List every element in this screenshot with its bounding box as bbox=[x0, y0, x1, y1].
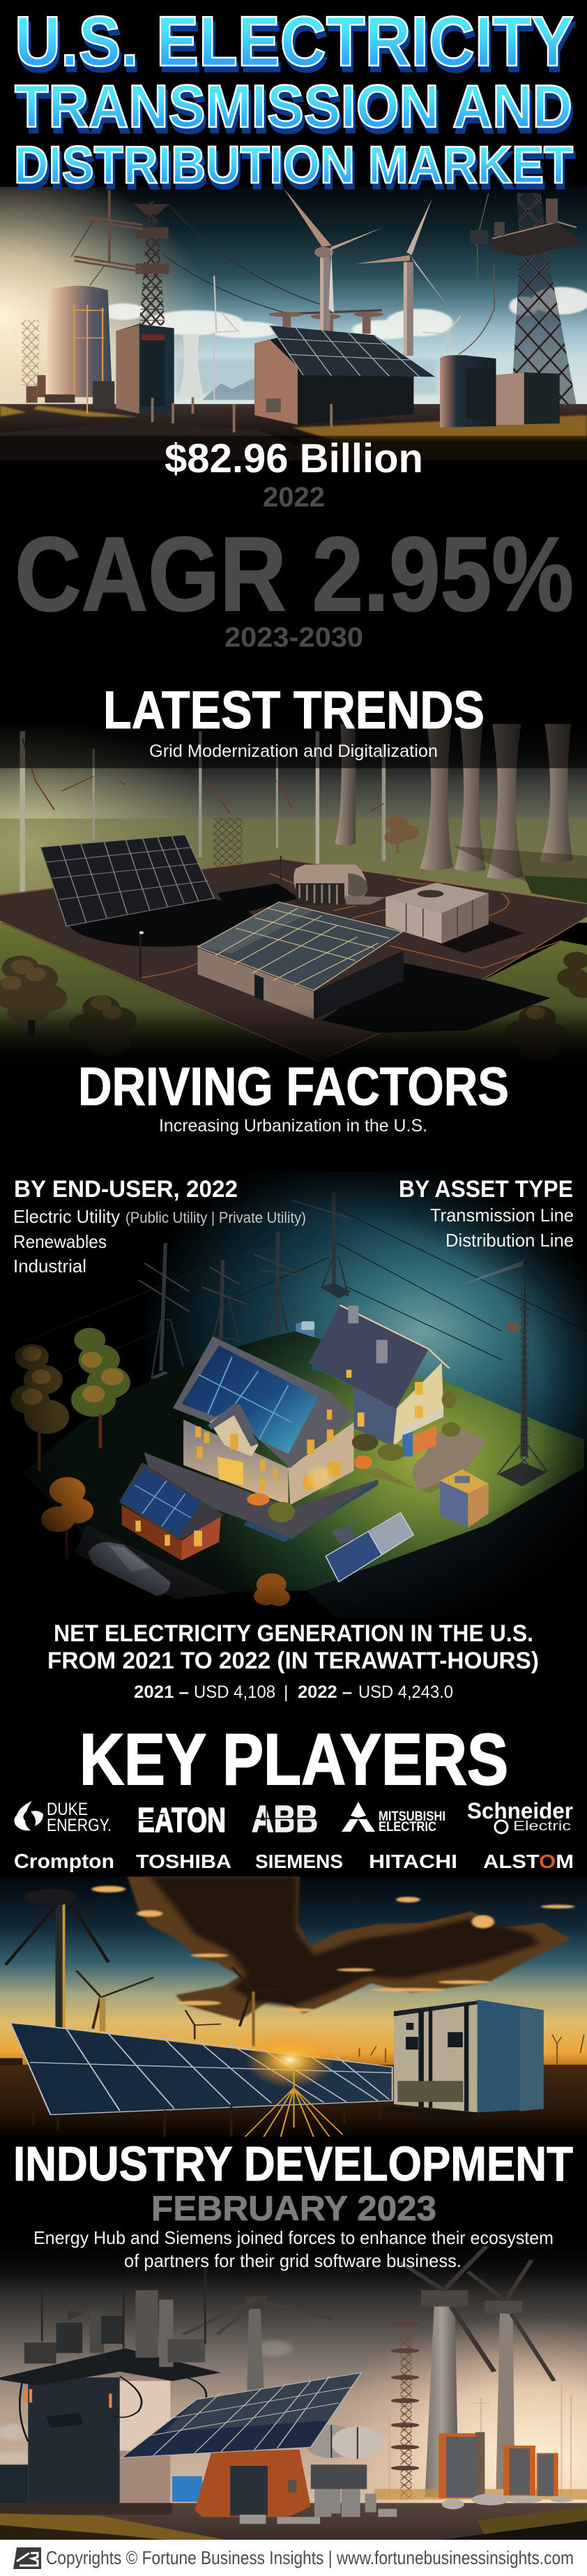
ground bbox=[0, 2503, 587, 2540]
market size value: $82.96 Billion bbox=[165, 436, 423, 481]
solar panel bbox=[122, 2373, 361, 2457]
small house bbox=[119, 1462, 224, 1560]
illustration: solar and storage site bbox=[0, 724, 587, 1062]
renewables item: Renewables bbox=[13, 1231, 107, 1252]
tank and small structures bbox=[45, 286, 112, 397]
logo: Duke Energy: ENERGY. bbox=[47, 1816, 112, 1835]
illustration: substation, solar panel and turbines bbox=[0, 2245, 587, 2540]
big pylon with turbine bbox=[455, 1217, 587, 1486]
asphalt yard bbox=[0, 859, 587, 1062]
fields bbox=[0, 2065, 587, 2148]
electric utility sub-types: (Public Utility | Private Utility) bbox=[125, 1209, 306, 1226]
foreground grass bbox=[0, 2506, 587, 2540]
logo: Duke Energy: DUKE bbox=[47, 1800, 88, 1819]
trees bbox=[0, 952, 587, 1062]
net electricity generation heading: FROM 2021 TO 2022 (IN TERAWATT-HOURS) bbox=[47, 1648, 539, 1674]
asset type heading: BY ASSET TYPE bbox=[399, 1176, 573, 1203]
distribution line item: Distribution Line bbox=[445, 1230, 574, 1251]
right cabinets bbox=[440, 355, 560, 428]
electrical cabinet left bbox=[116, 324, 174, 414]
water tank bbox=[294, 865, 386, 905]
solar-roof shed bbox=[198, 902, 404, 1019]
industry development description: Energy Hub and Siemens joined forces to enhance their ecosystem bbox=[33, 2227, 554, 2248]
illustration: solar houses and power lines bbox=[10, 1172, 587, 1618]
net generation values: | bbox=[284, 1682, 289, 1702]
market size year: 2022 bbox=[263, 482, 325, 513]
grass bbox=[0, 922, 587, 1070]
key players heading: KEY PLAYERS bbox=[79, 1719, 508, 1800]
turbine poles and blades bbox=[22, 731, 383, 908]
industry development description: of partners for their grid software business. bbox=[124, 2250, 462, 2271]
logo: Duke Energy bbox=[14, 1800, 112, 1835]
logo: Hitachi: HITACHI bbox=[369, 1851, 457, 1872]
logo: Crompton: Crompton bbox=[14, 1851, 114, 1873]
driving factors heading: DRIVING FACTORS bbox=[78, 1057, 509, 1117]
ground bbox=[0, 404, 587, 460]
by end-user segment bbox=[13, 1176, 306, 1276]
key player logos bbox=[14, 1798, 574, 1873]
development date: FEBRUARY 2023 bbox=[151, 2189, 436, 2228]
battery cabinet bbox=[440, 1470, 489, 1528]
driving factors subtitle: Increasing Urbanization in the U.S. bbox=[159, 1116, 427, 1136]
car bbox=[88, 1542, 170, 1596]
logo: Toshiba: TOSHIBA bbox=[136, 1851, 231, 1872]
footer bar bbox=[0, 2540, 587, 2576]
hill bbox=[22, 1332, 584, 1593]
logo: Eaton: EATON bbox=[137, 1802, 226, 1839]
substation bbox=[0, 2267, 221, 2515]
logo: Schneider Electric: Schneider bbox=[467, 1798, 573, 1823]
sun flare and rays bbox=[236, 2032, 342, 2146]
logo: Alstom: ALST OM bbox=[483, 1851, 574, 1872]
turbines bbox=[6, 1889, 584, 2065]
industry development description bbox=[33, 2227, 554, 2271]
clouds bbox=[92, 1876, 574, 2021]
logo: Schneider Electric bbox=[467, 1798, 573, 1834]
far tree bbox=[384, 816, 419, 853]
main title bbox=[14, 3, 576, 199]
logo: Mitsubishi Electric: ELECTRIC bbox=[379, 1820, 436, 1835]
solar-roof building bbox=[254, 326, 435, 425]
net generation values: USD 4,243.0 bbox=[358, 1682, 453, 1702]
illustration: solar farm at sunset bbox=[0, 1876, 587, 2137]
lattice tower bbox=[391, 2321, 419, 2499]
charging cabinets bbox=[439, 2432, 573, 2509]
spheres and equipment bbox=[240, 2425, 397, 2524]
solar panels bbox=[10, 2023, 392, 2139]
wind turbines bbox=[199, 188, 460, 400]
latest trends heading: LATEST TRENDS bbox=[103, 681, 485, 740]
logo: Siemens: SIEMENS bbox=[255, 1851, 343, 1872]
right lattice tower bbox=[459, 193, 584, 405]
latest trends subtitle: Grid Modernization and Digitalization bbox=[149, 741, 438, 761]
shadows bbox=[68, 883, 550, 1033]
cooling towers bbox=[335, 724, 573, 880]
CAGR period: 2023-2030 bbox=[224, 622, 363, 653]
solar array 1 bbox=[40, 835, 214, 926]
industrial item: Industrial bbox=[13, 1256, 86, 1276]
electric utility item: Electric Utility bbox=[13, 1206, 120, 1227]
lattice tower left bbox=[71, 190, 169, 326]
hero illustration: grid, wind and solar infrastructure bbox=[0, 187, 587, 460]
logo: Schneider Electric: Electric bbox=[513, 1819, 571, 1834]
net generation values: 2021 – bbox=[134, 1682, 189, 1702]
logo: Mitsubishi Electric: MITSUBISHI bbox=[379, 1809, 445, 1824]
porch and base bbox=[144, 1452, 378, 1539]
transformer box bbox=[386, 883, 489, 944]
trees bbox=[10, 1328, 290, 1606]
battery container bbox=[382, 2000, 544, 2121]
orange hut bbox=[195, 2450, 311, 2517]
net electricity generation heading: NET ELECTRICITY GENERATION IN THE U.S. bbox=[54, 1620, 533, 1647]
icon: Fortune Business Insights logo bbox=[13, 2547, 41, 2569]
back house bbox=[309, 1305, 449, 1456]
turbines bbox=[183, 2246, 554, 2497]
logo: ABB: ABB bbox=[252, 1798, 318, 1840]
net generation values: USD 4,108 bbox=[194, 1682, 275, 1702]
driveway bbox=[413, 1422, 487, 1491]
cooling stack bbox=[178, 335, 204, 397]
title shadow bbox=[16, 8, 576, 199]
net generation values: 2022 – bbox=[298, 1682, 352, 1702]
power lines and pylons bbox=[22, 1209, 587, 1371]
by asset type segment bbox=[399, 1176, 574, 1251]
main house bbox=[144, 1336, 460, 1542]
net electricity generation heading bbox=[47, 1620, 539, 1674]
orange cables bbox=[139, 873, 561, 978]
net generation values bbox=[134, 1682, 453, 1702]
transmission line item: Transmission Line bbox=[430, 1205, 574, 1226]
small solar panel bbox=[326, 1513, 413, 1582]
end-user heading: BY END-USER, 2022 bbox=[14, 1176, 238, 1203]
logo: Mitsubishi Electric bbox=[342, 1802, 445, 1835]
